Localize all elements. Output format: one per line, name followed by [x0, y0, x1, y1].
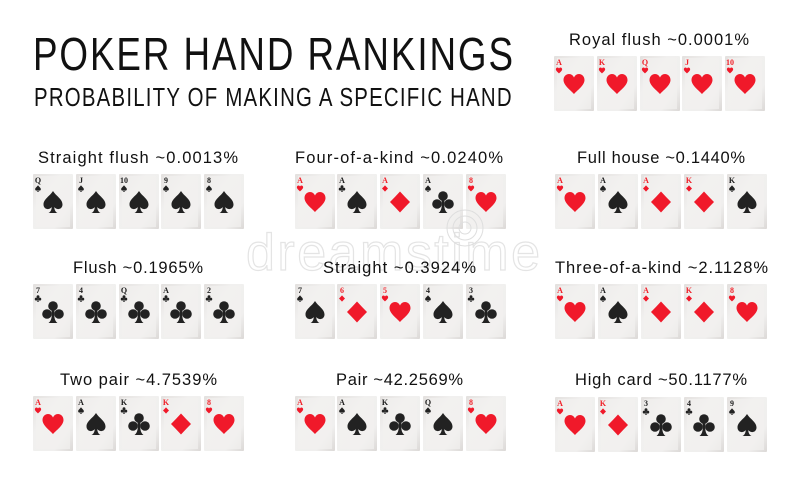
panel: straight flush: Q — [35, 176, 41, 185]
panel: full house: Full house ~0.1440% — [577, 149, 745, 167]
panel: royal flush: J — [685, 58, 689, 67]
panel: full house: A — [600, 176, 606, 185]
panel: three of a kind: 8 — [730, 286, 734, 295]
panel: flush: 7 — [36, 286, 40, 295]
panel: two pair: Two pair ~4.7539% — [60, 371, 217, 389]
panel: flush: 4 — [79, 286, 83, 295]
panel: pair: A — [339, 398, 345, 407]
panel: four of a kind: A — [339, 176, 345, 185]
panel: full house: K — [686, 176, 693, 185]
panel: full house: A — [557, 176, 563, 185]
panel: pair: K — [382, 398, 389, 407]
panel: four of a kind — [295, 149, 506, 229]
panel: flush: A — [163, 286, 169, 295]
panel: three of a kind: Three-of-a-kind ~2.1128% — [555, 259, 768, 277]
panel: straight: 5 — [383, 286, 387, 295]
panel: straight flush: 10 — [120, 176, 128, 185]
panel: straight: 4 — [426, 286, 430, 295]
panel: straight: Straight ~0.3924% — [323, 259, 476, 277]
panel: two pair — [33, 371, 244, 451]
panel: four of a kind: Four-of-a-kind ~0.0240% — [295, 149, 503, 167]
panel: straight: 6 — [340, 286, 344, 295]
panel: royal flush: A — [556, 58, 562, 67]
panel: flush: Flush ~0.1965% — [73, 259, 203, 277]
panel: high card: A — [557, 399, 563, 408]
panel: royal flush: Q — [642, 58, 648, 67]
panel: straight: 7 — [298, 286, 302, 295]
panel: straight flush: J — [79, 176, 83, 185]
panel: straight — [295, 259, 506, 339]
panel: royal flush: 10 — [726, 58, 734, 67]
panel: pair: A — [297, 398, 303, 407]
panel: pair: 8 — [469, 398, 473, 407]
panel: high card: 4 — [687, 399, 691, 408]
panel: pair: Q — [425, 398, 431, 407]
panel: three of a kind — [555, 259, 768, 339]
panel: straight: 3 — [469, 286, 473, 295]
panel: two pair: K — [121, 398, 128, 407]
panel: four of a kind: A — [382, 176, 388, 185]
panel: full house: A — [643, 176, 649, 185]
panel: straight flush: 8 — [207, 176, 211, 185]
panel: three of a kind: A — [557, 286, 563, 295]
panel: high card — [555, 371, 767, 452]
panel: flush — [33, 259, 244, 339]
panel: full house: K — [729, 176, 736, 185]
panel: three of a kind: A — [600, 286, 606, 295]
panel: two pair: A — [78, 398, 84, 407]
panel: flush: Q — [121, 286, 127, 295]
title: POKER HAND RANKINGS — [33, 28, 513, 80]
panel: high card: 9 — [730, 399, 734, 408]
panel: straight flush: Straight flush ~0.0013% — [38, 149, 238, 167]
watermark: dreamstime — [246, 224, 540, 282]
panel: straight flush: 9 — [164, 176, 168, 185]
panel: two pair: K — [163, 398, 170, 407]
panel: royal flush: K — [599, 58, 606, 67]
panel: high card: K — [600, 399, 607, 408]
panel: full house — [555, 149, 767, 229]
panel: four of a kind: 8 — [469, 176, 473, 185]
panel: royal flush — [554, 31, 765, 111]
panel: two pair: A — [35, 398, 41, 407]
watermark logo — [447, 210, 483, 246]
panel: four of a kind: A — [425, 176, 431, 185]
panel: pair — [295, 371, 506, 451]
panel: two pair: 8 — [207, 398, 211, 407]
panel: pair: Pair ~42.2569% — [336, 371, 463, 389]
panel: three of a kind: A — [643, 286, 649, 295]
panel: straight flush — [33, 149, 244, 229]
panel: four of a kind: A — [297, 176, 303, 185]
panel: high card: 3 — [644, 399, 648, 408]
panel: high card: High card ~50.1177% — [575, 371, 747, 389]
panel: flush: 2 — [207, 286, 211, 295]
subtitle: PROBABILITY OF MAKING A SPECIFIC HAND — [34, 83, 512, 112]
panel: royal flush: Royal flush ~0.0001% — [569, 31, 749, 49]
panel: three of a kind: K — [686, 286, 693, 295]
